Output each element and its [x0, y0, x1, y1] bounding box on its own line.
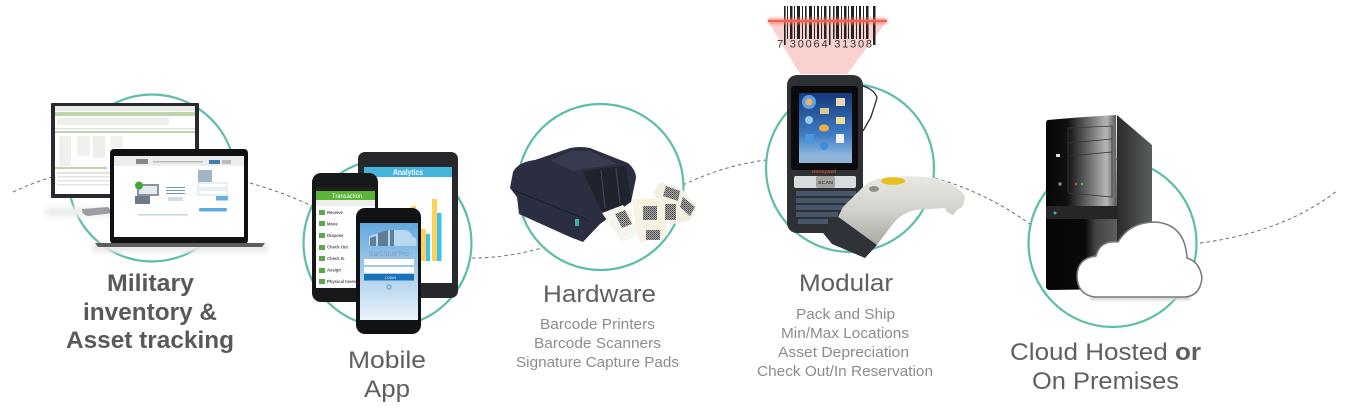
title: cloud hosted or on premises	[1010, 339, 1201, 395]
icon: handheld barcode scanner	[823, 176, 965, 258]
icon: tablet analytics: Analytics	[393, 168, 423, 177]
title: mobile app: Mobile	[348, 347, 426, 374]
teal ring	[518, 104, 684, 270]
title: military inventory: Asset tracking	[66, 327, 234, 354]
dashed connector line	[13, 160, 1338, 258]
icon: tower server	[1046, 115, 1152, 290]
icon: tablet analytics	[358, 152, 458, 298]
icon: cloud	[1077, 222, 1202, 300]
title: modular: Modular	[799, 270, 893, 297]
panel: modular	[757, 6, 965, 380]
icon: phone login: BarCloud Pro	[369, 251, 409, 258]
panel: mobile app	[304, 152, 472, 403]
modular feature list: Pack and Ship	[796, 307, 895, 323]
hardware feature list: Barcode Printers	[540, 317, 655, 333]
icon: phone transaction list: Transaction	[332, 194, 362, 200]
modular feature list	[757, 307, 933, 380]
icon: phone login	[356, 208, 421, 334]
hardware feature list	[516, 317, 679, 371]
modular feature list: Check Out/In Reservation	[757, 364, 933, 380]
panel: military inventory	[45, 94, 268, 354]
scan beam	[768, 21, 887, 74]
icon: phone transaction list: Receive	[327, 210, 344, 215]
modular feature list: Min/Max Locations	[781, 326, 909, 342]
title: mobile app: App	[364, 376, 410, 403]
icon: phone login: LOGIN	[385, 276, 396, 280]
icon: laptop	[92, 149, 268, 252]
panel: cloud hosted	[1010, 115, 1202, 395]
teal ring	[304, 159, 472, 327]
icon: barcode: 7 30064 31308	[777, 38, 872, 50]
icon: phone transaction list: Dispose	[327, 233, 344, 238]
title: military inventory: inventory &	[83, 299, 217, 326]
panel: hardware	[510, 104, 697, 371]
icon: handheld computer: Honeywell	[812, 169, 836, 174]
teal ring	[1028, 159, 1196, 327]
icon: phone transaction list: Move	[327, 222, 338, 226]
title: cloud hosted or on premises: On Premises	[1032, 368, 1179, 395]
icon: barcode labels	[602, 182, 697, 243]
hardware feature list: Barcode Scanners	[534, 336, 661, 352]
icon: barcode	[768, 6, 887, 50]
icon: desktop monitor	[45, 103, 199, 217]
icon: phone transaction list	[312, 173, 378, 302]
hardware feature list: Signature Capture Pads	[516, 355, 679, 371]
title: cloud hosted or on premises: Cloud Hosted or	[1010, 339, 1201, 366]
teal ring	[68, 94, 236, 262]
icon: phone transaction list: Check In	[327, 256, 345, 261]
icon: barcode printer	[510, 147, 636, 242]
title: mobile app	[348, 347, 426, 403]
modular feature list: Asset Depreciation	[778, 345, 909, 361]
icon: phone transaction list: Check Out	[327, 244, 349, 250]
icon: handheld computer: SCAN	[818, 180, 834, 186]
title: hardware: Hardware	[543, 281, 656, 308]
teal ring	[766, 84, 934, 252]
icon: phone transaction list: Assign	[327, 268, 341, 272]
title: military inventory	[66, 270, 234, 354]
icon: handheld computer	[787, 75, 877, 233]
icon: phone transaction list: Physical Inventory	[327, 279, 365, 284]
title: military inventory: Military	[107, 270, 195, 297]
